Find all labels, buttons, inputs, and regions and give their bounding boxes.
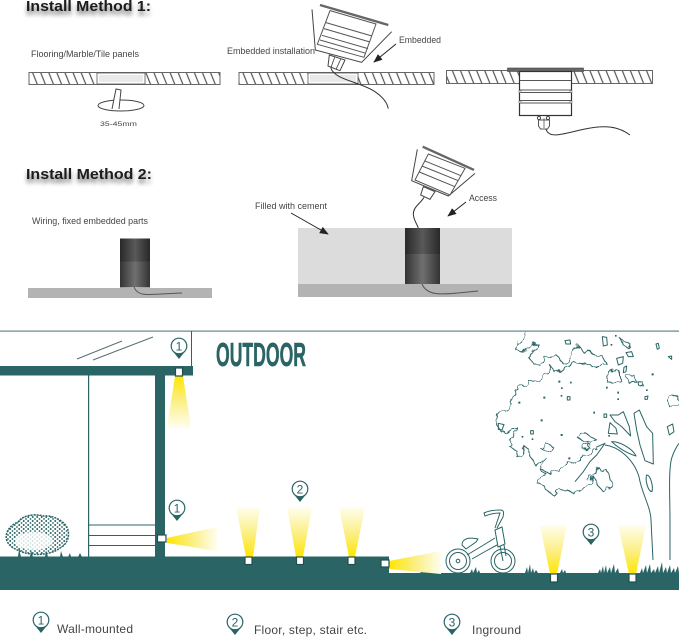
panel: method 2 right [255, 147, 512, 297]
label: access: Access [469, 193, 497, 203]
pin 3 inground: 3 [588, 526, 595, 540]
icon: hole saw [98, 89, 144, 111]
arrow: access [448, 202, 466, 216]
label: filled with cement: Filled with cement [255, 201, 327, 211]
icon: tilted lamp [312, 5, 392, 109]
pin 1 roof [171, 338, 187, 359]
pin 3 inground [583, 524, 599, 545]
tricycle [446, 510, 515, 573]
top rule [0, 330, 679, 332]
icon: installed lamp [508, 68, 630, 135]
pin 1 wall: 1 [174, 502, 181, 516]
grass [420, 562, 679, 573]
ground [28, 288, 212, 298]
panel: method 2 left [28, 216, 212, 298]
house [0, 331, 193, 557]
embedded cylinder [405, 228, 478, 294]
legend item: inground: Inground [472, 623, 521, 637]
icon: tilted lamp [412, 147, 475, 228]
panel: method 1 step 1 [29, 49, 220, 128]
lamp fixtures [158, 368, 636, 582]
tree [497, 332, 679, 560]
label: wiring: Wiring, fixed embedded parts [32, 216, 148, 226]
panel: method 1 step 3 [446, 68, 652, 135]
title: OUTDOOR: OUTDOOR [216, 337, 306, 374]
legend item: wall-mounted: 1 [38, 614, 45, 628]
pin 1 wall [169, 500, 185, 521]
hatched panel [446, 70, 652, 84]
ground [0, 556, 679, 590]
legend item: inground [444, 614, 521, 637]
panel: method 1 step 2 [227, 5, 441, 109]
label: embedded installation: Embedded installation [227, 46, 315, 56]
arrow: embedded [374, 44, 396, 62]
pin 1 roof: 1 [176, 340, 183, 354]
label: hole size: 35-45mm [100, 121, 137, 128]
arrow: cement [291, 213, 328, 234]
hatched panel with hole [29, 72, 220, 84]
legend item: wall-mounted [33, 612, 133, 636]
legend item: wall-mounted: Wall-mounted [57, 622, 133, 636]
heading: Install Method 2: Install Method 2: [26, 166, 152, 183]
legend item: floor, step, stair: 2 [232, 616, 239, 630]
pin 2 floor: 2 [297, 482, 304, 496]
legend item: floor, step, stair [227, 614, 367, 637]
legend [33, 612, 521, 637]
legend item: floor, step, stair: Floor, step, stair etc. [254, 623, 367, 637]
label: flooring panels: Flooring/Marble/Tile panels [31, 49, 139, 59]
pin 2 floor [292, 481, 308, 502]
panel: outdoor scene [0, 330, 679, 590]
canopy outline [497, 332, 678, 496]
ground [298, 284, 512, 297]
legend item: inground: 3 [449, 616, 456, 630]
cement block [298, 228, 512, 284]
beams [167, 376, 646, 574]
embedded cylinder [120, 238, 182, 295]
label: embedded: Embedded [399, 35, 441, 45]
bush [6, 515, 82, 557]
hatched panel with hole [239, 72, 434, 84]
